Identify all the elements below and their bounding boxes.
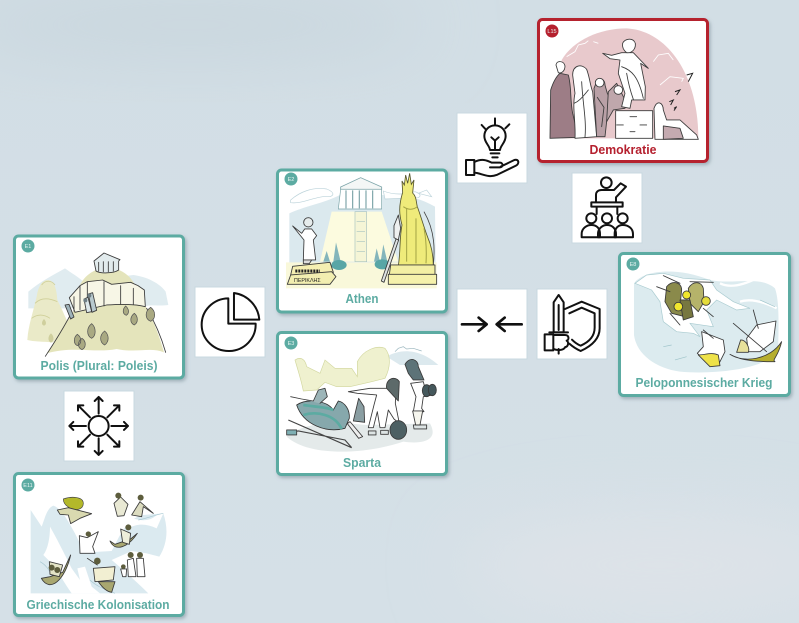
label: Peloponnesischer Krieg: Peloponnesischer Krieg	[636, 376, 772, 390]
badge: L15: L15	[547, 29, 557, 35]
label: Griechische Kolonisation: Griechische Kolonisation	[26, 598, 170, 612]
icon: converging arrows	[457, 289, 527, 359]
illustration: colonisation map	[31, 493, 166, 593]
badge: E11	[22, 478, 34, 492]
illustration: Athens with Athena statue: ΠEPIKΛHΣ	[294, 278, 321, 284]
illustration: Spartan training	[287, 347, 438, 452]
illustration: orator speaking to citizens	[550, 28, 698, 139]
card: Demokratie	[538, 20, 708, 162]
illustration: war map with warriors and ships	[634, 272, 782, 372]
card: Polis	[14, 236, 184, 378]
label: Sparta: Sparta	[343, 456, 382, 470]
badge: E11: E11	[23, 483, 33, 489]
icon: speaker addressing audience	[572, 173, 642, 243]
badge: E2: E2	[288, 177, 294, 183]
icon: arrows radiating from circle	[64, 391, 134, 461]
badge: E1	[22, 240, 34, 252]
badge: E8	[626, 258, 640, 270]
label: Demokratie: Demokratie	[590, 143, 657, 157]
illustration: Athens with Athena statue	[286, 173, 437, 288]
badge: E3: E3	[288, 341, 294, 347]
card: Peloponnesischer Krieg	[620, 254, 790, 396]
badge: E3	[284, 336, 298, 350]
card: Athen	[278, 170, 446, 312]
icon: hand holding light bulb	[457, 113, 527, 183]
badge: E1: E1	[25, 244, 31, 250]
label: Polis: Polis (Plural: Poleis)	[40, 359, 158, 373]
badge: E8: E8	[630, 262, 636, 268]
card: Griechische Kolonisation	[14, 474, 184, 616]
card: Sparta	[278, 332, 446, 474]
badge: E2	[284, 172, 298, 186]
illustration: hill with acropolis	[27, 253, 168, 356]
label: Athen: Athen	[346, 292, 378, 306]
icon: sword and shield	[537, 289, 607, 359]
badge: L15	[546, 24, 558, 38]
icon: pie chart	[195, 287, 265, 357]
